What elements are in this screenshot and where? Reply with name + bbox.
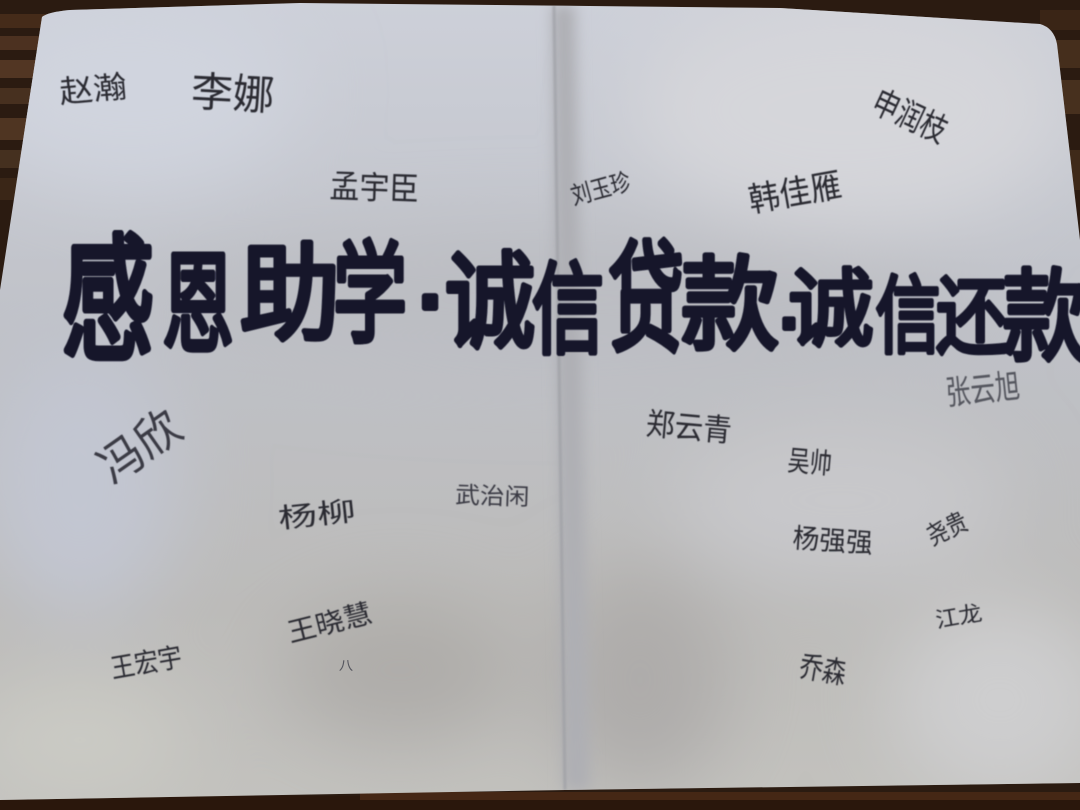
main title: 贷 [608,233,684,367]
signature: 王晓慧: 王晓慧 [284,598,375,648]
main title: 恩 [162,244,234,367]
main title: 诚 [788,263,874,358]
signature: 冯欣: 冯欣 [89,400,191,494]
main title: 还 [936,270,1008,365]
signature: 吴帅: 吴帅 [786,446,833,481]
signature: 杨强强: 杨强强 [792,523,874,559]
main title: 学 [333,233,407,356]
signature: 孟宇臣: 孟宇臣 [329,168,420,208]
signature: 江龙: 江龙 [933,600,984,633]
signature: 韩佳雁: 韩佳雁 [746,166,844,219]
signature: 尧贵: 尧贵 [922,507,972,551]
signature: 乔森: 乔森 [797,650,849,691]
main title: 信 [532,255,604,367]
signature: 赵瀚: 赵瀚 [58,69,128,110]
center fold [552,5,590,790]
signature: 王宏宇: 王宏宇 [108,642,184,685]
signature: 张云旭: 张云旭 [944,368,1022,413]
main title: 信 [876,271,940,365]
main title: 助 [240,236,340,354]
main title: 感 [62,225,154,377]
main title: · [412,233,448,356]
signatures [58,68,1022,691]
signature: 刘玉珍: 刘玉珍 [568,168,634,210]
signature: 武治闲: 武治闲 [455,482,530,511]
main title: 诚 [445,243,535,362]
signature: 李娜: 李娜 [190,68,276,119]
small pen mark: 八 [339,659,354,673]
signature: 郑云青: 郑云青 [645,407,733,449]
signature: 杨柳: 杨柳 [277,496,357,535]
main title [62,229,1080,364]
signature: 申润枝: 申润枝 [866,83,953,151]
main title: · [774,268,804,368]
main title: 款 [681,249,779,363]
